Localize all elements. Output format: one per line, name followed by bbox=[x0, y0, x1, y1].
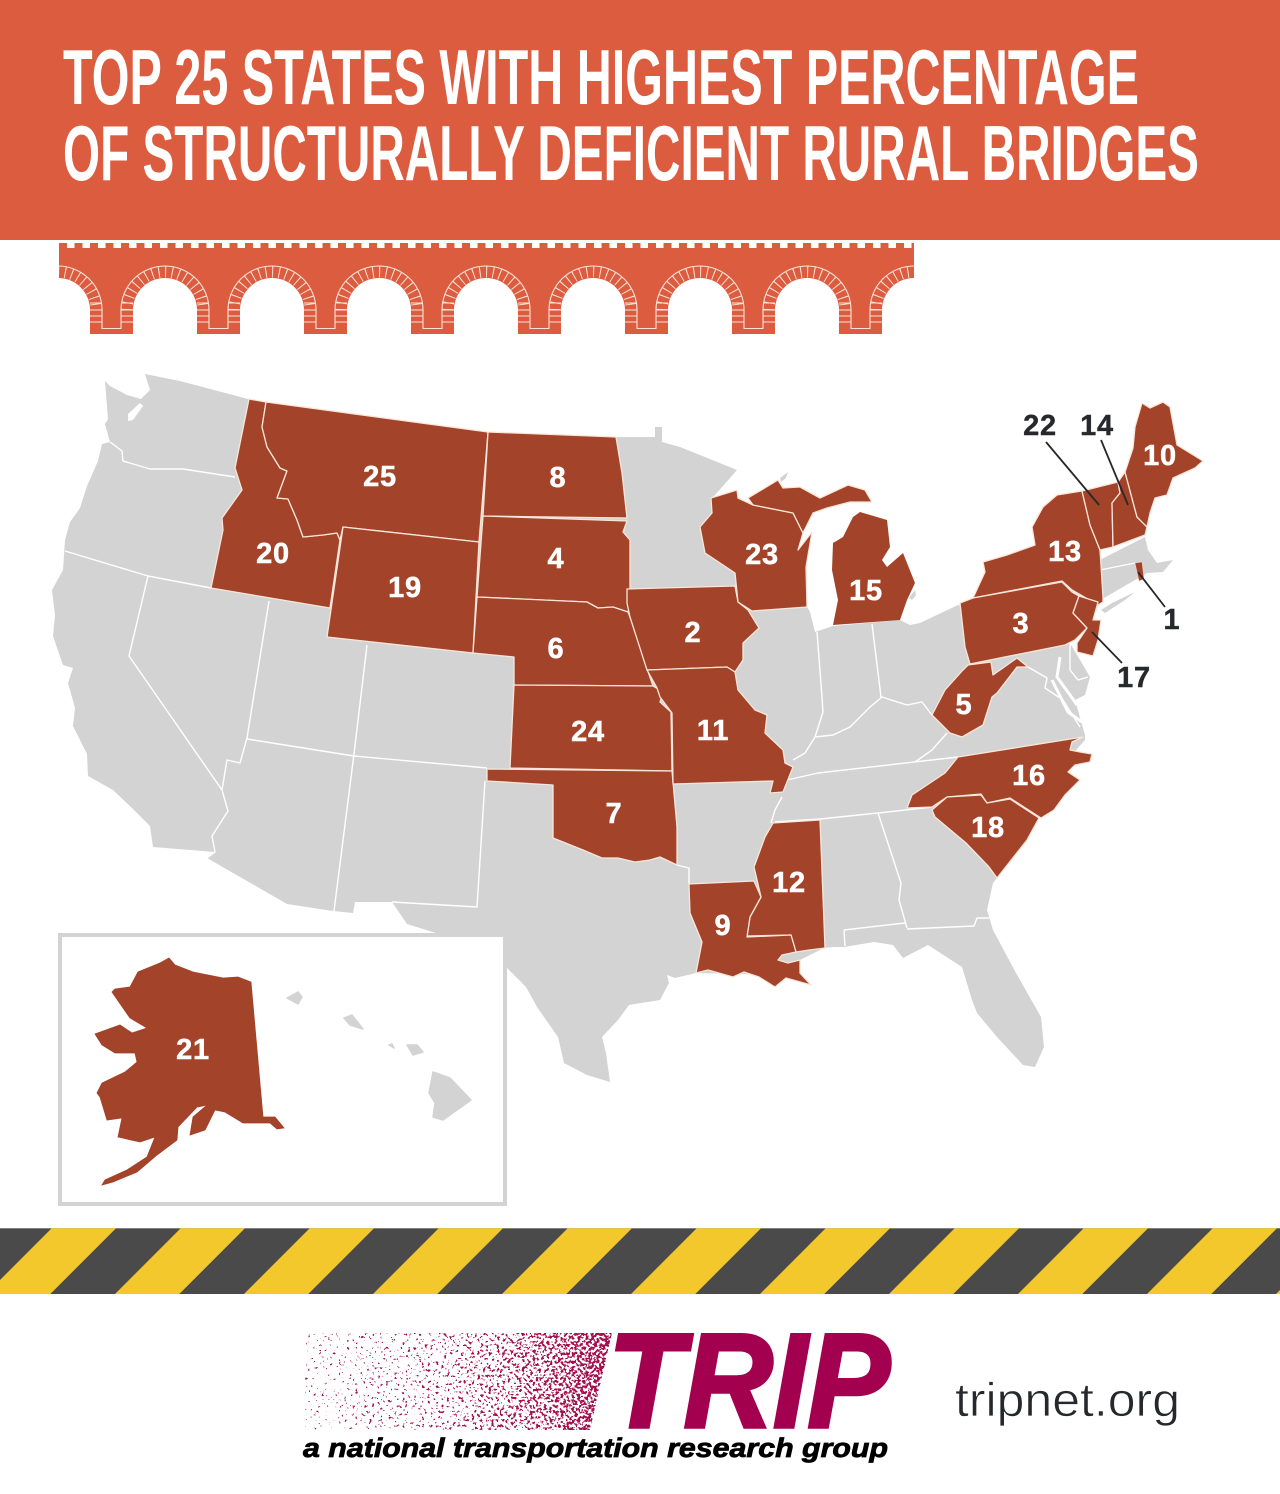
state: Vermont, rank 22 bbox=[1082, 482, 1120, 550]
state: West Virginia, rank 5 bbox=[932, 658, 1028, 737]
state: Hawaii bbox=[287, 992, 471, 1120]
state: Oklahoma, rank 7: 7 bbox=[606, 798, 622, 830]
state: South Carolina, rank 18 bbox=[932, 795, 1039, 878]
state: New Hampshire, rank 14 bbox=[1112, 472, 1147, 547]
map: contiguous United States bbox=[52, 374, 1203, 1082]
state: North Carolina, rank 16: 16 bbox=[1012, 760, 1046, 792]
state: New York, rank 13 bbox=[973, 491, 1103, 605]
state: North Dakota, rank 8 bbox=[483, 432, 627, 518]
state: Wisconsin, rank 23 bbox=[700, 490, 812, 611]
icon: brick arched bridge bbox=[59, 243, 914, 334]
state: Iowa, rank 2 bbox=[627, 586, 759, 672]
state: Oklahoma, rank 7 bbox=[487, 769, 677, 865]
state: Idaho, rank 20: 20 bbox=[256, 538, 290, 570]
state: Mississippi, rank 12: 12 bbox=[772, 867, 806, 899]
state: Alaska, rank 21: 21 bbox=[176, 1034, 210, 1066]
state: Nebraska, rank 6: 6 bbox=[548, 633, 564, 665]
callout: rank 17 label and leader line bbox=[1092, 632, 1151, 694]
hazard stripe band bbox=[0, 1228, 1280, 1294]
state: Wyoming, rank 19: 19 bbox=[388, 572, 422, 604]
state border lines in white bbox=[65, 442, 1135, 946]
callout: rank 22 label and leader line bbox=[1023, 410, 1099, 505]
state: Wisconsin, rank 23: 23 bbox=[745, 539, 779, 571]
state: South Dakota, rank 4 bbox=[477, 516, 631, 612]
logo speckle pattern bbox=[305, 1333, 612, 1430]
Chesapeake Bay bbox=[1052, 657, 1082, 722]
state: Michigan, rank 15 bbox=[748, 480, 915, 625]
state: South Dakota, rank 4: 4 bbox=[548, 543, 564, 575]
state: Maine, rank 10 bbox=[1125, 402, 1203, 527]
state: South Carolina, rank 18: 18 bbox=[971, 812, 1005, 844]
state: Mississippi, rank 12 bbox=[747, 820, 825, 952]
state: West Virginia, rank 5: 5 bbox=[956, 689, 972, 721]
state: Pennsylvania, rank 3 bbox=[960, 582, 1087, 664]
state: Louisiana, rank 9: 9 bbox=[715, 910, 731, 942]
state: Nebraska, rank 6 bbox=[473, 597, 653, 686]
state: Kansas, rank 24 bbox=[510, 685, 672, 771]
state: Missouri, rank 11 bbox=[647, 667, 793, 793]
state: Maine, rank 10: 10 bbox=[1143, 440, 1177, 472]
callout: rank 14 label and leader line bbox=[1080, 410, 1128, 505]
state: Kansas, rank 24: 24 bbox=[571, 716, 605, 748]
logo tagline: a national transportation research group bbox=[303, 1433, 888, 1463]
state: New Jersey, rank 17 bbox=[1073, 596, 1101, 656]
header banner bbox=[0, 0, 1280, 240]
callout: rank 22 label and leader line: 22 bbox=[1023, 410, 1057, 442]
logo: TRIP bbox=[303, 1307, 891, 1463]
callout: rank 14 label and leader line: 14 bbox=[1080, 410, 1114, 442]
state: Alaska, rank 21 bbox=[95, 958, 284, 1185]
callout: rank 1 label and leader line bbox=[1138, 572, 1180, 636]
state: Idaho, rank 20 bbox=[211, 399, 340, 608]
state: Wyoming, rank 19 bbox=[327, 527, 479, 653]
website address: tripnet.org bbox=[955, 1373, 1180, 1426]
state: Missouri, rank 11: 11 bbox=[697, 715, 729, 747]
small gray islands, Long Island and Puget Sound bbox=[128, 403, 1135, 613]
state: Louisiana, rank 9 bbox=[689, 881, 811, 987]
callout: rank 1 label and leader line: 1 bbox=[1164, 604, 1180, 636]
callout: rank 17 label and leader line: 17 bbox=[1117, 662, 1151, 694]
state: New York, rank 13: 13 bbox=[1048, 536, 1082, 568]
state: Michigan, rank 15: 15 bbox=[849, 575, 883, 607]
state: Rhode Island, rank 1 bbox=[1135, 562, 1144, 581]
state: Montana, rank 25 bbox=[262, 402, 488, 542]
state: North Dakota, rank 8: 8 bbox=[550, 462, 566, 494]
state: Pennsylvania, rank 3: 3 bbox=[1013, 608, 1029, 640]
state: Iowa, rank 2: 2 bbox=[685, 617, 701, 649]
state: Montana, rank 25: 25 bbox=[363, 461, 397, 493]
base land in gray bbox=[52, 374, 1173, 1082]
inset panel: Alaska and Hawaii bbox=[60, 935, 505, 1204]
logo wordmark: TRIP bbox=[608, 1307, 891, 1456]
state: North Carolina, rank 16 bbox=[907, 737, 1092, 818]
